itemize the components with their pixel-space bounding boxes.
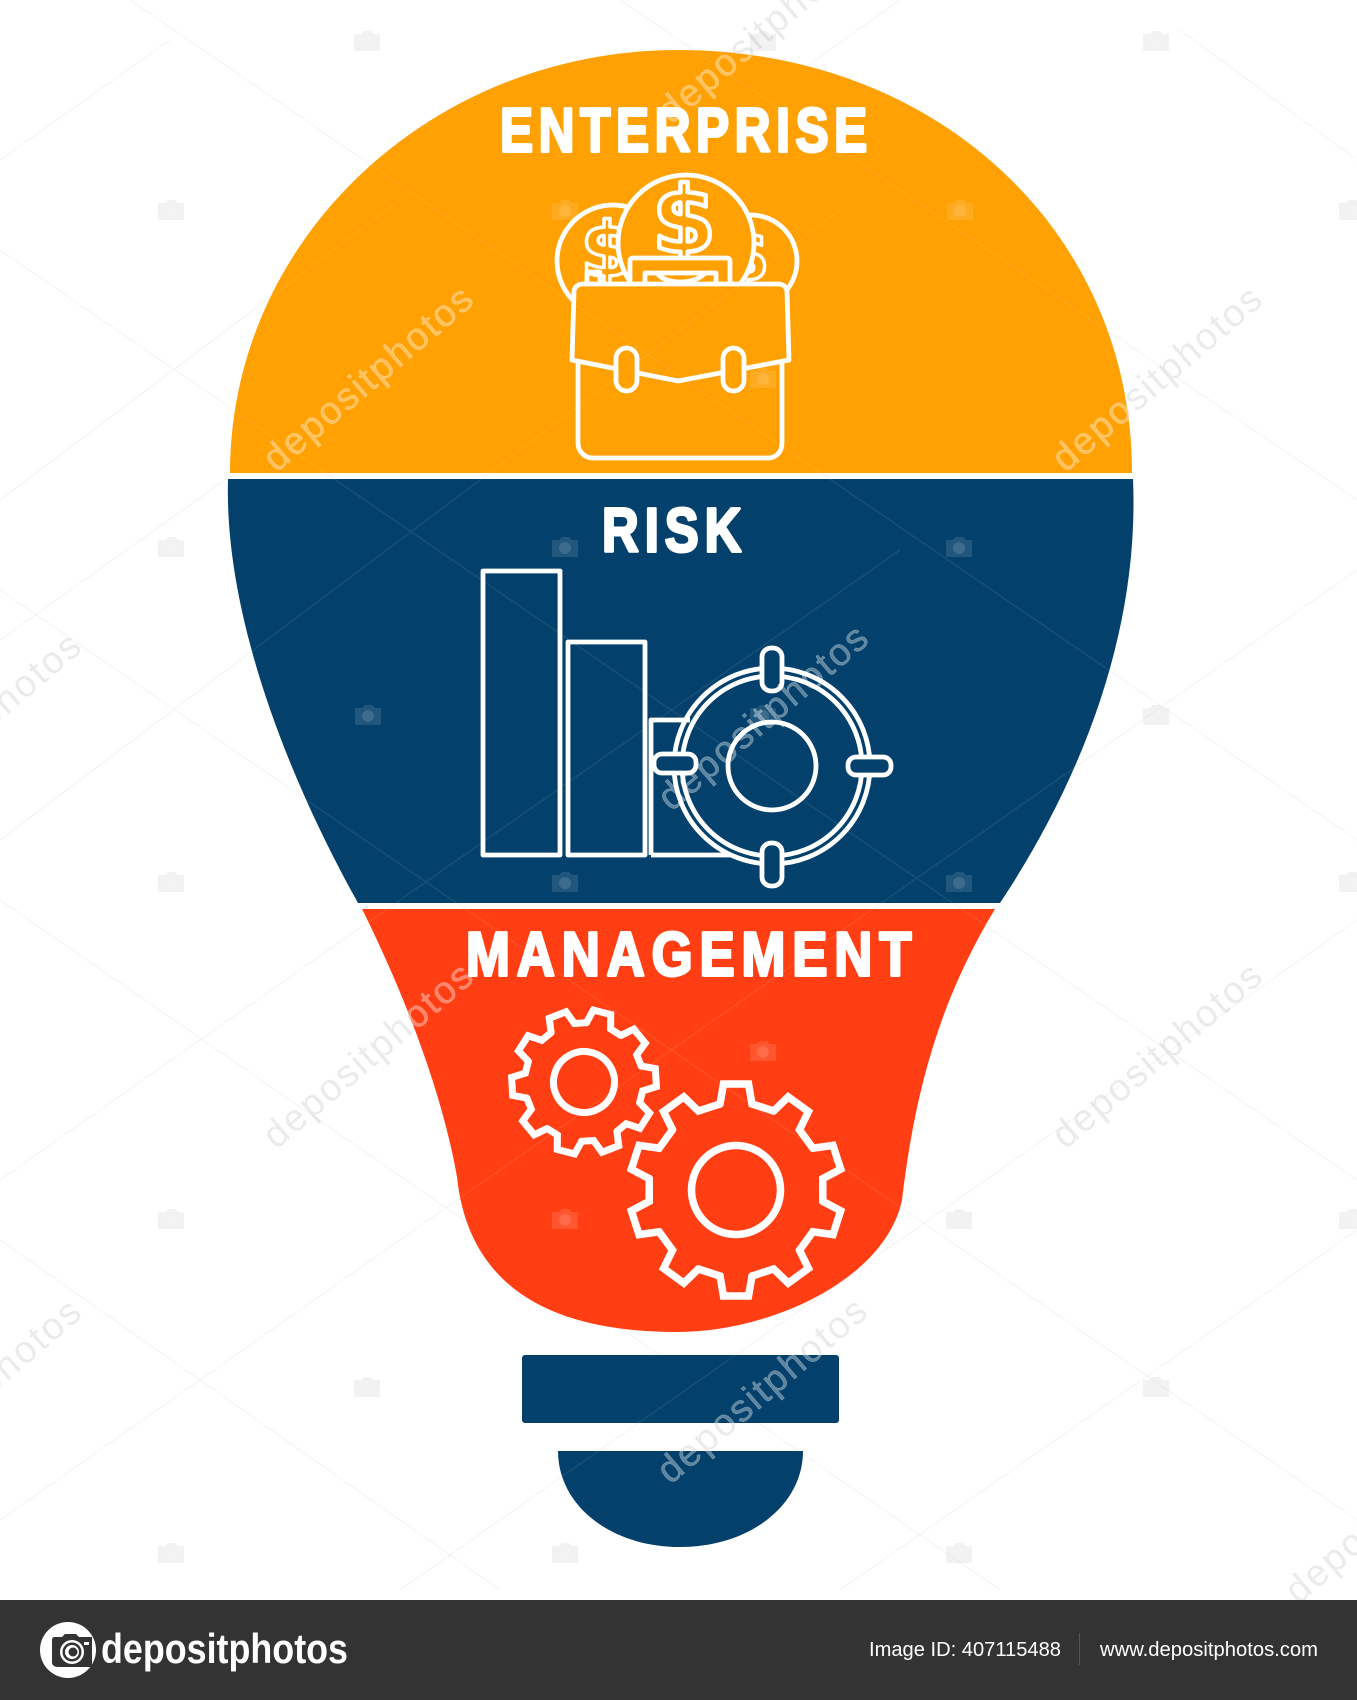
light bulb [228, 50, 1134, 1547]
watermark background: depositphotos [255, 955, 481, 1157]
watermark background: depositphotos [1044, 955, 1270, 1157]
small gear [492, 993, 676, 1171]
target [654, 648, 891, 886]
watermark overlay on bulb [235, 50, 1128, 1482]
bulb segment: navy middle [228, 479, 1134, 903]
watermark background: depositphotos [649, 1290, 875, 1492]
clasps [616, 348, 637, 391]
website: www.depositphotos.com [1099, 1639, 1318, 1661]
coins and banknote: $ [652, 167, 716, 274]
watermark overlay on bulb: depositphotos [1044, 278, 1270, 480]
watermark overlay on bulb: depositphotos [255, 955, 481, 1157]
logo wordmark: depositphotos [101, 1625, 348, 1672]
bulb segment: red lower [362, 909, 995, 1332]
icon: gears [492, 993, 848, 1298]
watermark overlay on bulb: depositphotos [650, 617, 876, 819]
icon: bar chart with target [483, 571, 891, 886]
coins and banknote: $ [721, 215, 769, 297]
case body [578, 362, 782, 458]
watermark overlay on bulb: depositphotos [255, 278, 481, 480]
logo mark: camera [40, 1622, 96, 1678]
heading: ENTERPRISE: ENTERPRISE [500, 95, 867, 165]
bulb base: upper bar [522, 1355, 839, 1423]
footer bar [0, 1600, 1357, 1700]
watermark overlay on bulb: depositphotos [649, 1290, 875, 1492]
case flap [572, 284, 789, 381]
heading: MANAGEMENT: MANAGEMENT [466, 921, 911, 990]
large gear [624, 1082, 848, 1298]
bulb base: lower cap [558, 1451, 803, 1547]
image id: Image ID: 407115488 [869, 1639, 1061, 1661]
watermark background: depositphotos [1044, 278, 1270, 480]
bars [483, 571, 730, 855]
coins and banknote: $ [581, 205, 633, 294]
coins and banknote [557, 167, 797, 317]
icon: briefcase with coins [557, 167, 797, 458]
heading: RISK: RISK [602, 497, 741, 566]
bulb segment: orange dome [230, 50, 1132, 473]
